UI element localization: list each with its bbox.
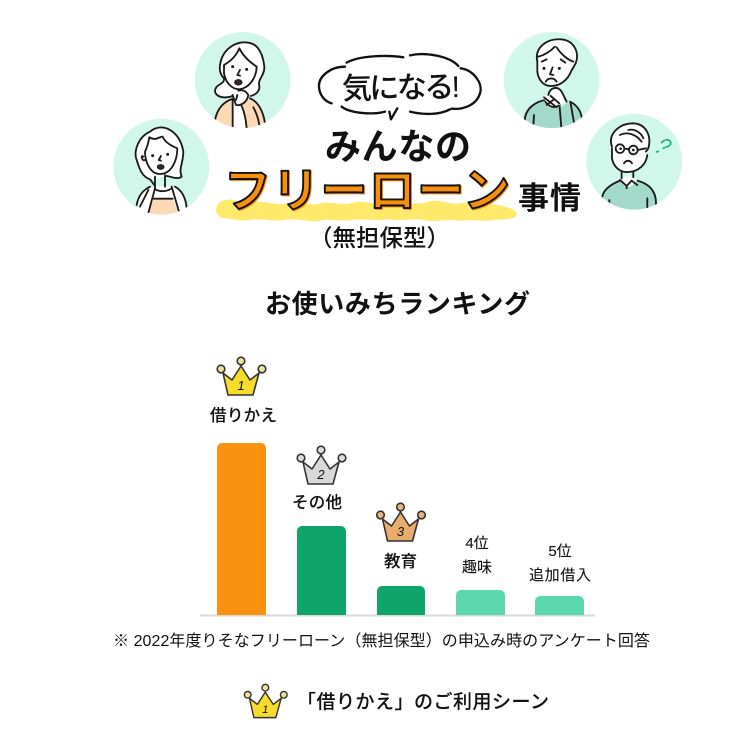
illustration: man with hand on chin (504, 32, 600, 135)
section heading: ご利用シーン: 「借りかえ」のご利用シーン (297, 691, 549, 713)
label: 教育: 教育 (384, 552, 417, 571)
label: 5位: 5位 (548, 543, 572, 560)
crown: rank 3: 3 (397, 524, 405, 539)
illustration: woman with long hair (195, 32, 291, 133)
bar: 教育 (377, 586, 425, 615)
crown: rank 2: 2 (316, 467, 325, 482)
label: その他: その他 (292, 493, 342, 512)
bar: 借りかえ (217, 443, 266, 615)
section title: お使いみちランキング (265, 289, 530, 319)
crown: rank 3 (377, 503, 425, 541)
bar: 趣味 (456, 590, 505, 615)
heading: フリーローン: フリーローン (224, 164, 510, 217)
subheading: 無担保型: （無担保型） (309, 225, 450, 251)
heading: 事情: 事情 (518, 181, 581, 216)
illustration: woman with apron (113, 119, 209, 217)
bubble text: 気になる! (342, 71, 460, 106)
label: 趣味: 趣味 (462, 559, 492, 576)
crown: rank 1: 1 (237, 378, 245, 393)
speech bubble (319, 54, 481, 119)
yellow brush highlight (216, 200, 517, 221)
footnote: ※ 2022年度りそなフリーローン（無担保型）の申込み時のアンケート回答 (113, 632, 650, 650)
crown: rank 2 (297, 446, 346, 484)
label: 借りかえ: 借りかえ (210, 406, 277, 425)
bar chart (217, 443, 584, 615)
label: 追加借入: 追加借入 (529, 567, 591, 584)
label: 4位: 4位 (465, 535, 489, 552)
crown: rank 1 (217, 357, 266, 395)
crown: section icon: 1 (262, 704, 268, 716)
heading: みんなの: みんなの (325, 126, 471, 167)
illustration: man with glasses (586, 114, 682, 217)
crown: section icon (244, 684, 287, 718)
bar: その他 (297, 526, 346, 615)
baseline (200, 614, 595, 616)
bar: 追加借入 (535, 596, 584, 615)
icon: question mark (657, 140, 671, 152)
